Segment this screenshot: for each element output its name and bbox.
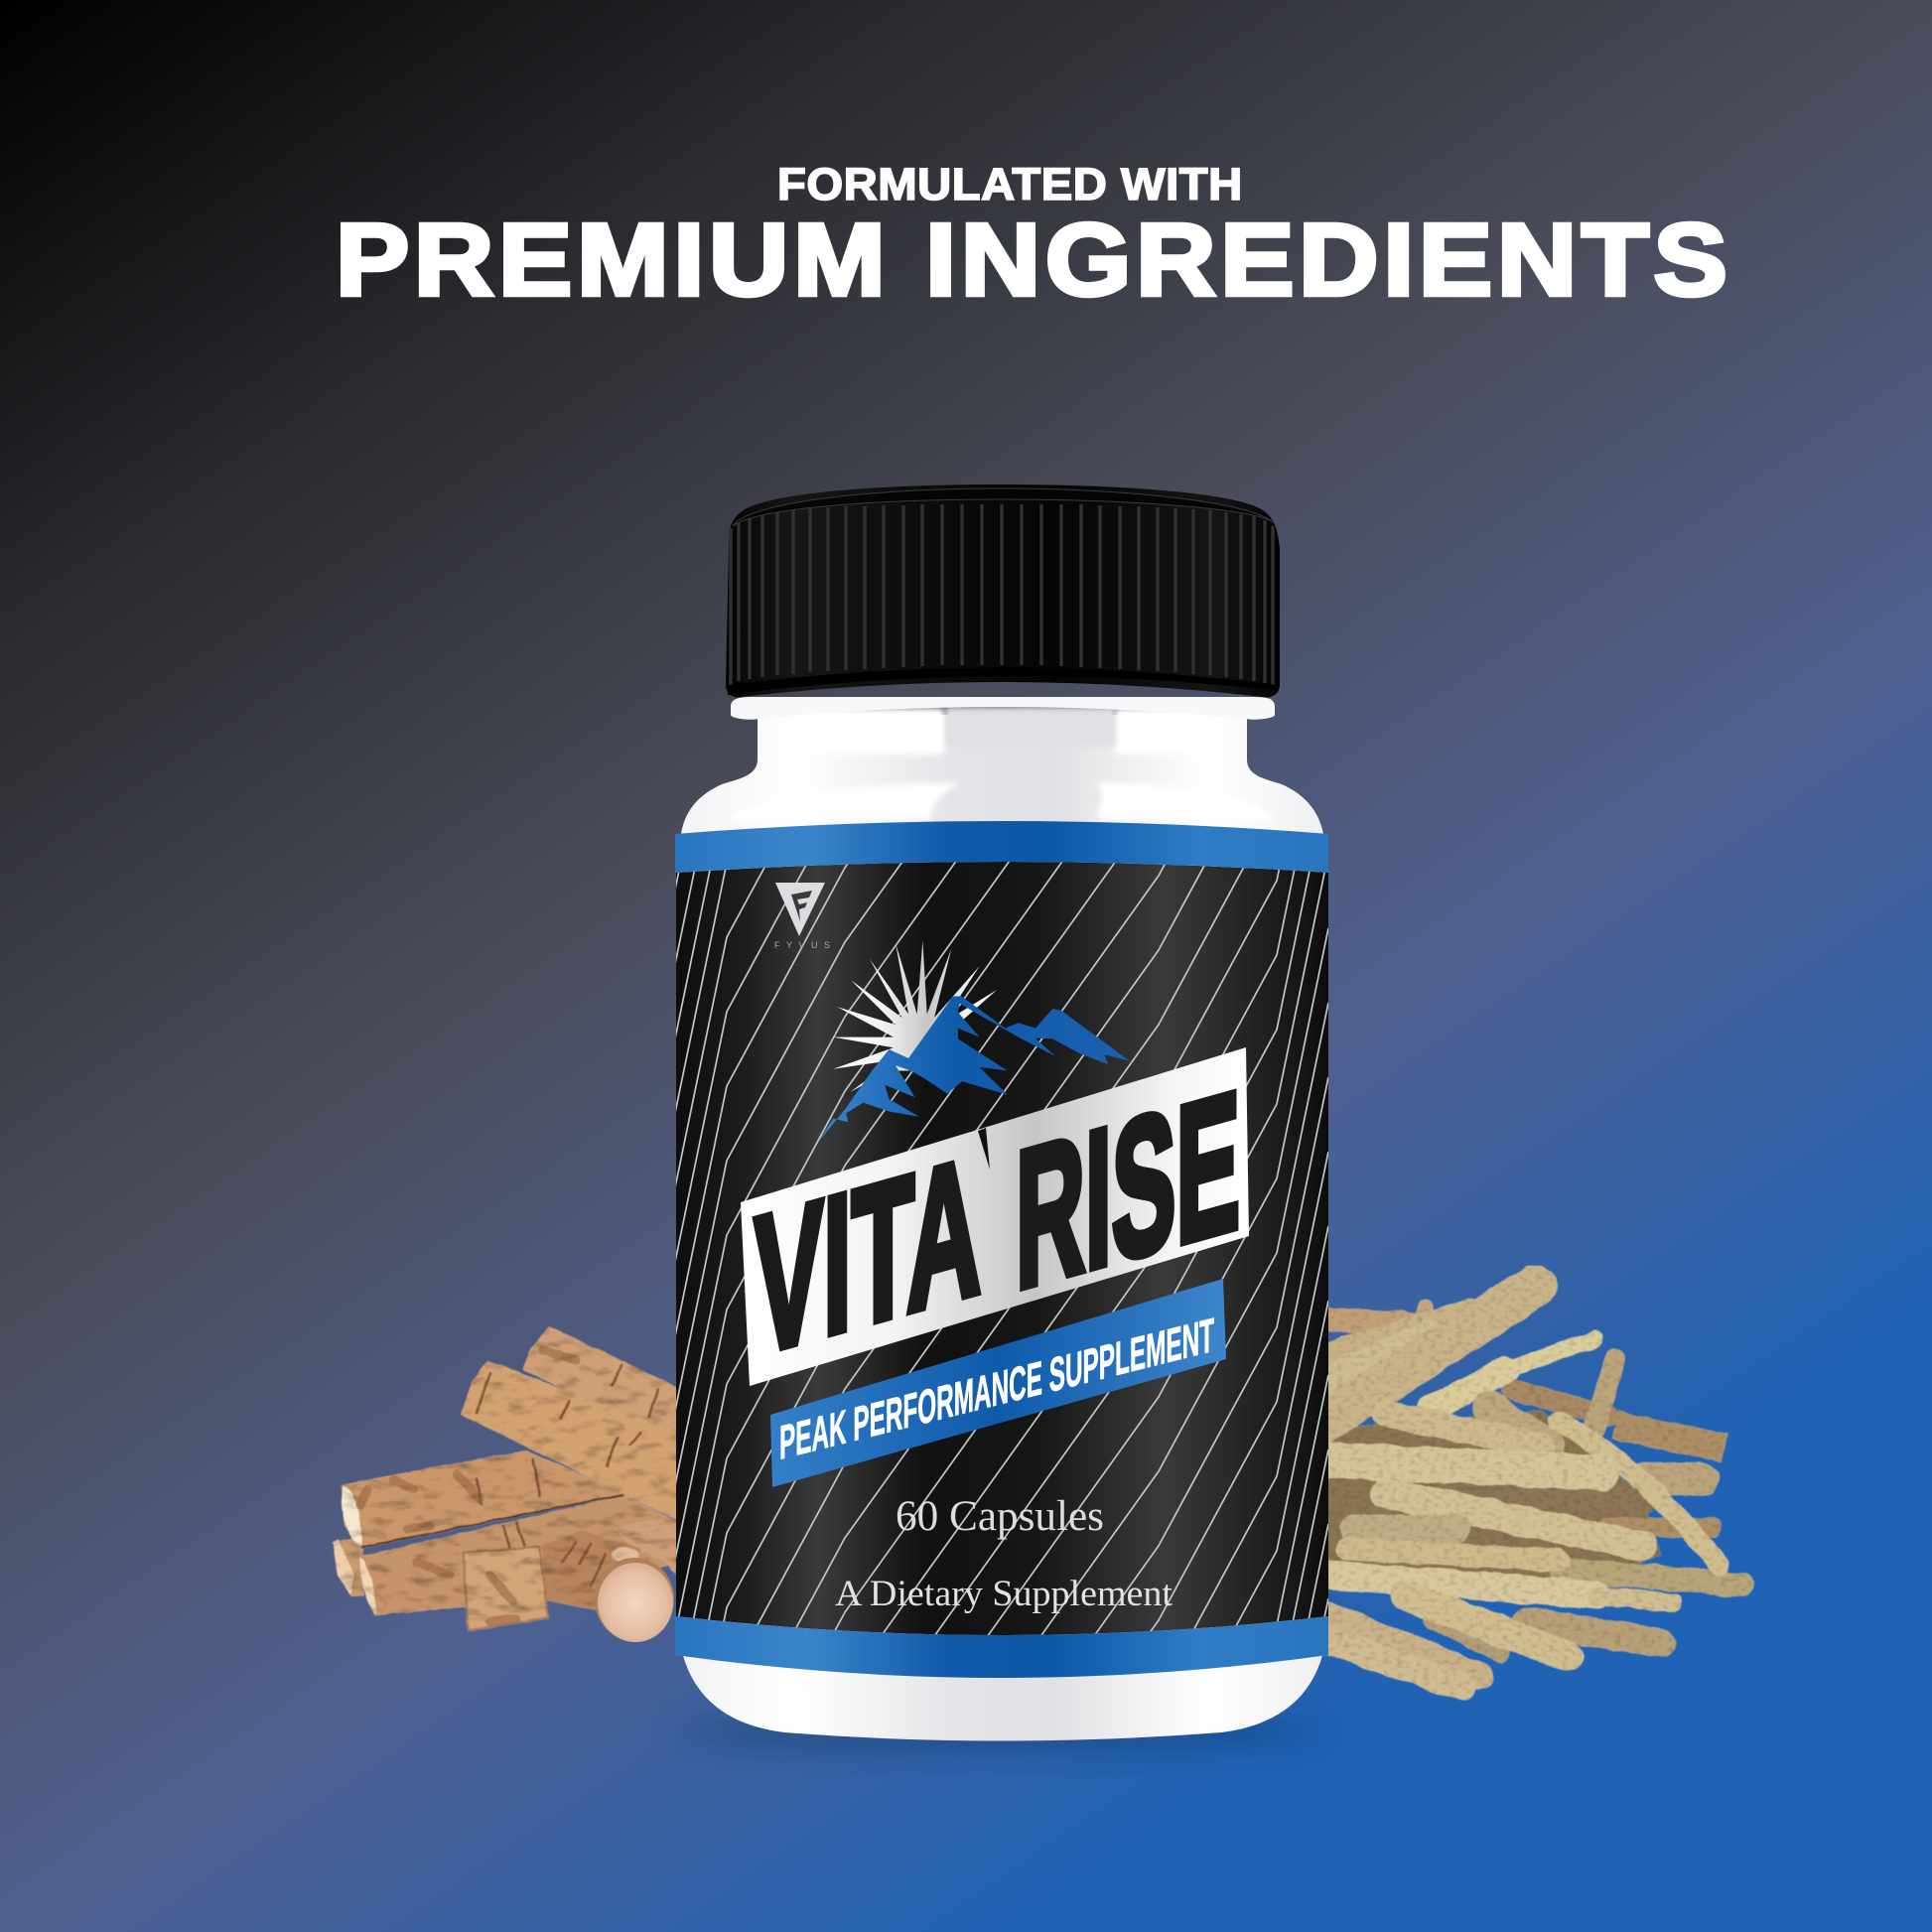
product name panel: [741, 1047, 1249, 1396]
bottle body: [681, 715, 1324, 1741]
brand name: FYVUS: [774, 940, 830, 950]
ingredient: brown root logs on the left: [333, 1328, 676, 1630]
product name: VITA: [755, 1116, 981, 1396]
tagline: PEAK PERFORMANCE SUPPLEMENT: [779, 1309, 1214, 1470]
ingredient: pale ashwagandha roots on the right: [1317, 1286, 1742, 1688]
cap top rim: [733, 488, 1273, 526]
cap: [726, 484, 1280, 697]
bottle shadow: [674, 1719, 1329, 1746]
cap lower lip: [728, 667, 1278, 695]
sun rays: [833, 940, 997, 1092]
title line: formulated with: FORMULATED WITH: [777, 159, 1242, 209]
mountains: [818, 997, 1130, 1143]
top blue band: [675, 821, 1328, 873]
bottle: [675, 484, 1328, 1759]
label diagonal stripes: [676, 862, 1328, 1635]
supplement note: A Dietary Supplement: [835, 1574, 1173, 1614]
title: [336, 159, 1727, 317]
neck highlights: [730, 707, 1274, 820]
cap ribs: [731, 504, 1273, 685]
ingredient: cut root end disc: [595, 1558, 674, 1642]
product name panel: RISE: [1016, 1050, 1240, 1330]
icon: sunburst and mountains: [818, 940, 1130, 1143]
capsule count: 60 Capsules: [896, 1493, 1104, 1540]
label background: [676, 862, 1328, 1635]
bottom blue band: [675, 1616, 1328, 1678]
title line: premium ingredients: PREMIUM INGREDIENTS: [336, 203, 1727, 317]
neck ring: [731, 697, 1275, 720]
icon: fyvus brand logo: [774, 883, 830, 950]
tagline ribbon: [770, 1279, 1226, 1487]
